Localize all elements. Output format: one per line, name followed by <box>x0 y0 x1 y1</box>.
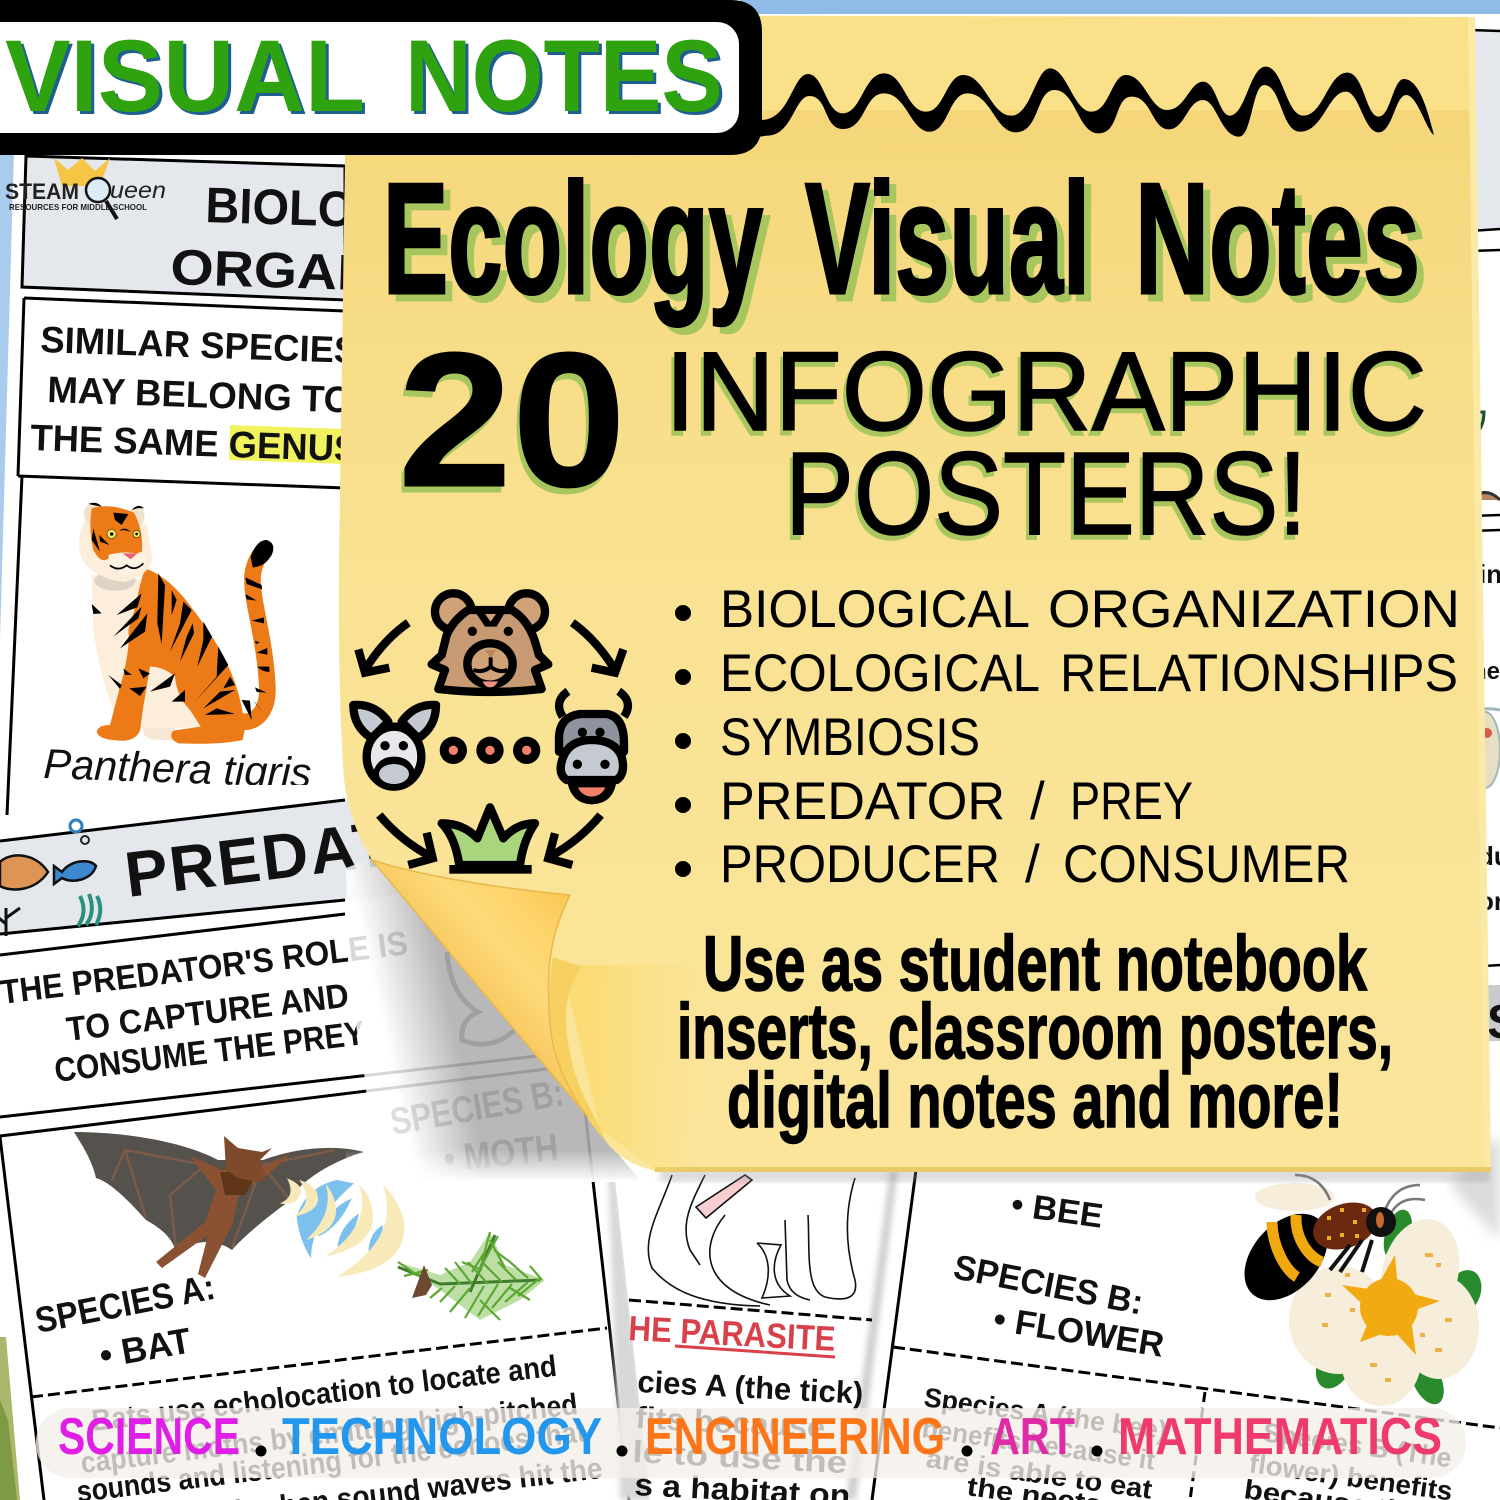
panel: biology header: BIOLOGICAL <box>205 177 501 242</box>
text block: tick benefits: cies A (the tick) <box>637 1364 864 1411</box>
text block: bat echolocation: capture moths by emitting high-pitched <box>79 1388 579 1480</box>
text block: species A bat: SPECIES A: <box>32 1266 218 1341</box>
list: topics: PREY <box>1070 772 1193 831</box>
list: topics: / <box>1030 772 1045 831</box>
illustration: echolocation waves <box>280 1178 404 1277</box>
number: 20: 20 <box>398 312 626 527</box>
sheets: right edge fragments: s <box>1471 611 1484 638</box>
faint species B text under the curl: SPECIES B: <box>387 1072 567 1144</box>
caption: Panthera tigris: Panthera tigris <box>43 740 312 796</box>
list: topics: ORGANIZATION <box>1048 580 1460 639</box>
sheets: right edge fragments <box>1470 30 1500 1049</box>
logo: The STEAM Queen: STEAM <box>5 179 79 204</box>
faint species B text under the curl <box>387 952 567 1181</box>
heading: infographic: INFOGRAPHIC <box>665 329 1427 454</box>
list: topics: CONSUMER <box>1063 835 1350 894</box>
text block: bee benefits <box>920 1382 1169 1500</box>
text block: similar species: THE SAME GENUS <box>30 417 359 469</box>
panel: predator header: PREDATOR <box>121 794 496 911</box>
illustration: bee <box>1228 1175 1425 1316</box>
text block: flower benefits: Species B (The <box>1261 1417 1453 1473</box>
badge: visual notes <box>0 0 762 155</box>
panel: biology header <box>22 156 596 308</box>
list: topics: BIOLOGICAL <box>720 580 1030 639</box>
icon: donkey <box>353 705 436 787</box>
curl shadow on sheets <box>346 858 1500 1240</box>
illustration: animal line art <box>648 1175 856 1306</box>
label: engineering: ENGINEERING <box>645 1408 945 1466</box>
icon: bear <box>432 593 548 692</box>
heading: Ecology Visual Notes: Visual <box>805 151 1090 327</box>
note underside shading <box>549 957 700 1172</box>
sheet: biological organization <box>5 156 596 815</box>
list: topics: / <box>1025 835 1040 894</box>
heading: Ecology Visual Notes <box>383 151 1420 327</box>
text block: tick benefits <box>632 1364 864 1500</box>
logo: The STEAM Queen: ueen <box>110 177 166 203</box>
list: topics <box>675 580 1460 894</box>
illustration: tiger <box>79 503 273 744</box>
list: topics: PREDATOR <box>720 772 1005 831</box>
icon: grass <box>442 807 535 874</box>
text block: tick benefits: fits because <box>635 1400 826 1445</box>
text block: species A bat: • BAT <box>96 1320 194 1376</box>
illustration: moth on pine branch <box>397 1232 545 1320</box>
label: mathematics: MATHEMATICS <box>1118 1408 1442 1466</box>
faint species B text under the curl: • MOTH <box>442 1127 560 1181</box>
badge: visual notes: VISUAL <box>5 19 365 133</box>
text block: species list: SPECIES B: <box>950 1248 1146 1322</box>
logo: The STEAM Queen: RESOURCES FOR MIDDLE SCHOOL <box>9 202 147 212</box>
band: STEAM subjects <box>36 1408 1466 1478</box>
badge: visual notes: NOTES <box>405 19 723 133</box>
text block: tick benefits: le to use the <box>632 1434 848 1480</box>
panel: predator header <box>0 794 496 936</box>
panel: biology header: ORGANIZATION <box>170 239 596 308</box>
label: science: SCIENCE <box>58 1408 240 1466</box>
text block: similar species: SIMILAR SPECIES <box>40 319 359 371</box>
sheet: parasite <box>608 1170 898 1500</box>
text block: bee benefits: Species A (the bee) <box>922 1382 1169 1446</box>
icon: food web <box>353 593 628 874</box>
text block: species list: • FLOWER <box>991 1299 1167 1365</box>
text block: bat echolocation <box>75 1350 604 1500</box>
list: topics: ECOLOGICAL <box>720 644 1040 703</box>
heading: the parasite: HE PARASITE <box>628 1309 836 1359</box>
sheet: mutualism <box>872 1170 1500 1500</box>
icon: cow <box>559 691 628 804</box>
text block: flower benefits <box>1242 1417 1454 1500</box>
text block: predator role: CONSUME THE PREY <box>52 1014 367 1090</box>
text block: bat echolocation: Bats use echolocation to locate and <box>90 1350 559 1438</box>
panel: sticky note <box>339 15 1491 1172</box>
illustration: flower <box>1289 1207 1489 1409</box>
list: topics: RELATIONSHIPS <box>1060 644 1458 703</box>
text block: species A bat <box>32 1266 218 1376</box>
logo: The STEAM Queen <box>5 158 166 219</box>
curled corner flap <box>372 860 588 1117</box>
text block: predator role: TO CAPTURE AND <box>64 977 351 1049</box>
heading: posters: POSTERS! <box>785 428 1307 560</box>
icon: arrows <box>358 623 623 865</box>
label: technology: TECHNOLOGY <box>282 1408 602 1466</box>
text block: predator role: THE PREDATOR'S ROLE IS <box>0 924 410 1012</box>
text block: similar species: MAY BELONG TO <box>47 369 353 421</box>
label: art: ART <box>990 1408 1075 1466</box>
heading: Ecology Visual Notes: Ecology <box>383 151 763 327</box>
icon: dots <box>440 737 540 764</box>
illustration: bat <box>74 1132 364 1278</box>
text block: uses <box>677 919 1393 1144</box>
text block: similar species <box>18 298 359 488</box>
text block: bee benefits: benefits because it <box>920 1413 1157 1476</box>
text block: predator role <box>0 914 590 1117</box>
sheet: predator <box>0 794 629 1500</box>
text block: species list: • BEE <box>1009 1185 1105 1236</box>
list: topics: SYMBIOSIS <box>720 708 980 767</box>
wavy line <box>754 67 1434 137</box>
list: topics: PRODUCER <box>720 835 1000 894</box>
text block: species list <box>950 1185 1167 1365</box>
